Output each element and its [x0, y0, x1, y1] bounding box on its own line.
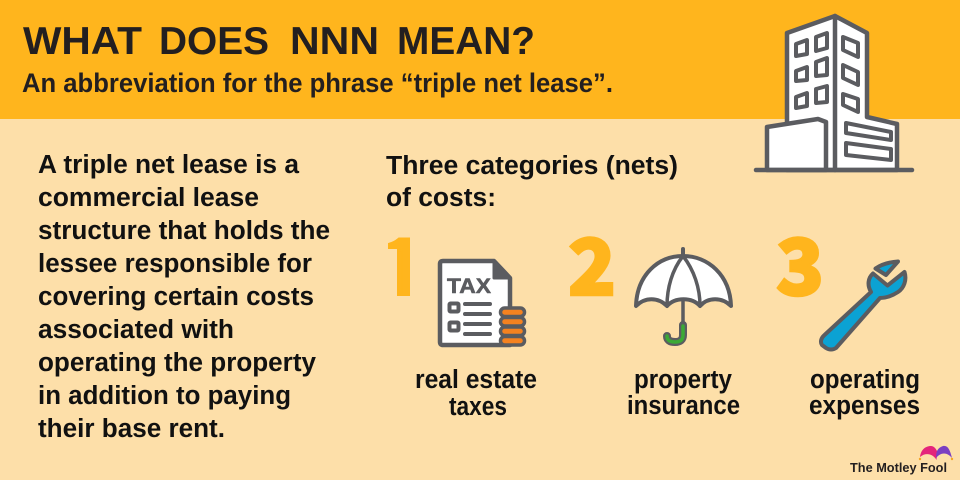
- paragraph: definition: covering certain costs: [38, 283, 314, 311]
- paragraph: definition: their base rent.: [38, 415, 225, 443]
- logo: The Motley Fool: The Motley Fool: [850, 460, 947, 475]
- paragraph: definition: structure that holds the: [38, 217, 330, 245]
- label: real estate taxes: real estate: [415, 366, 537, 394]
- logo: The Motley Fool: [850, 446, 953, 475]
- paragraph: definition: in addition to paying: [38, 382, 291, 410]
- title: NNN: [290, 20, 379, 63]
- title: MEAN?: [397, 20, 535, 63]
- paragraph: definition: associated with: [38, 316, 234, 344]
- icon: office building: [756, 16, 912, 170]
- subtitle: An abbreviation for the phrase “triple net lease”.: [22, 68, 613, 98]
- label: real estate taxes: [415, 366, 537, 421]
- title: DOES: [159, 20, 269, 63]
- label: real estate taxes: taxes: [449, 393, 507, 421]
- label: property insurance: insurance: [627, 392, 740, 420]
- heading: three categories: Three categories (nets): [386, 152, 678, 180]
- icon: umbrella: [636, 249, 731, 342]
- label: operating expenses: [809, 366, 920, 420]
- paragraph: definition: A triple net lease is a: [38, 151, 300, 179]
- number 2: 2: [568, 206, 616, 318]
- icon: tax document with coins: TAX: [447, 275, 491, 298]
- icon: jester hat: [919, 446, 953, 460]
- paragraph: definition: lessee responsible for: [38, 250, 312, 278]
- label: operating expenses: operating: [810, 366, 920, 394]
- heading: three categories: [386, 152, 678, 212]
- label: property insurance: [627, 366, 740, 420]
- title: WHAT: [23, 20, 143, 63]
- paragraph: definition: commercial lease: [38, 184, 259, 212]
- paragraph: definition: operating the property: [38, 349, 317, 377]
- icon: wrench: [821, 262, 905, 350]
- label: operating expenses: expenses: [809, 392, 920, 420]
- header band: [0, 0, 960, 119]
- paragraph: definition: [38, 151, 330, 443]
- label: property insurance: property: [634, 366, 733, 394]
- icon: tax document with coins: [440, 261, 524, 345]
- number 3: 3: [776, 206, 824, 318]
- number 1: 1: [384, 211, 418, 323]
- title: [23, 20, 535, 63]
- heading: three categories: of costs:: [386, 184, 496, 212]
